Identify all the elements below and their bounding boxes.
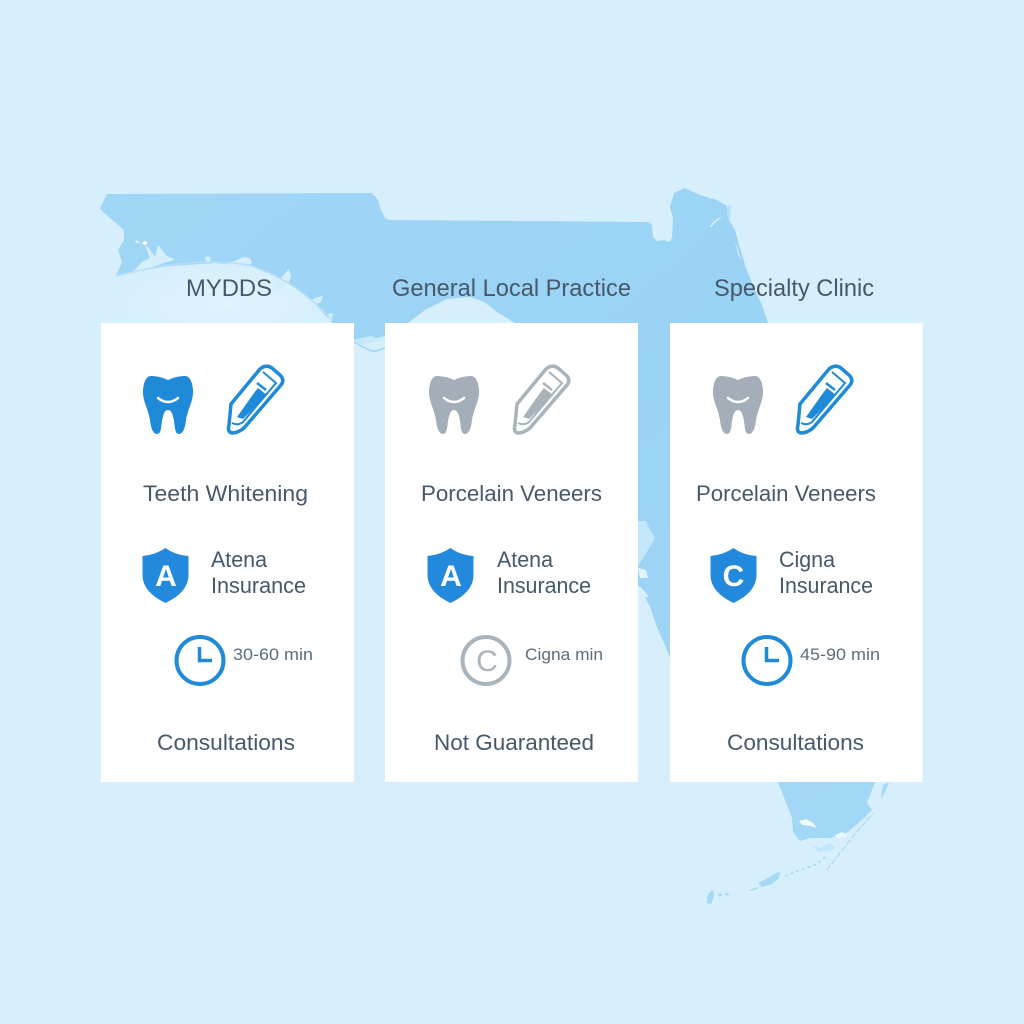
text: availability: Consultations — [727, 730, 864, 755]
icon: clock — [176, 637, 224, 684]
icon: grey circled C — [462, 637, 510, 684]
icon: blue tooth — [143, 376, 193, 434]
text: availability: Consultations — [157, 730, 295, 755]
text: service: Porcelain Veneers — [421, 481, 602, 506]
panel: MYDDS — [101, 323, 354, 782]
text: insurance — [497, 547, 591, 598]
icon: shield A — [142, 548, 188, 603]
panel: General Local Practice — [385, 323, 638, 782]
text: insurance — [779, 547, 873, 598]
text: insurance: Atena — [211, 547, 268, 572]
map: Lake and southern tip highlights — [799, 819, 817, 828]
text: time: 45-90 min — [800, 645, 880, 664]
map: barrier coast line — [116, 262, 332, 320]
heading: MYDDS: MYDDS — [186, 275, 272, 302]
heading: General Local Practice: General Local Practice — [392, 275, 631, 302]
icon: shield A — [428, 548, 474, 603]
icon: grey tooth — [429, 376, 479, 434]
text: insurance: Atena — [497, 547, 554, 572]
text: insurance — [211, 547, 306, 598]
icon: shield C: C — [723, 560, 744, 593]
map: Big Bend islands — [354, 336, 385, 344]
text: service: Porcelain Veneers — [696, 481, 876, 506]
text: time: 30-60 min — [233, 645, 313, 664]
text: service: Teeth Whitening — [143, 481, 308, 506]
panel: Specialty Clinic — [670, 323, 922, 782]
text: insurance: Insurance — [779, 573, 873, 598]
map: gulf coast island line — [354, 342, 385, 351]
icon: grey pencil clip — [514, 366, 569, 433]
icon: clock — [744, 637, 790, 684]
text: insurance: Cigna — [779, 547, 836, 572]
map: northeast sliver — [710, 217, 741, 260]
icon: shield A: A — [155, 560, 177, 593]
map: Florida Keys — [707, 782, 889, 904]
text: insurance: Insurance — [211, 573, 306, 598]
map: gulf inlet bays — [638, 521, 655, 566]
icon: shield C — [710, 548, 756, 603]
map: panhandle bays — [133, 240, 333, 322]
icon: blue pencil clip — [797, 366, 852, 433]
text: availability: Not Guaranteed — [434, 730, 594, 755]
icon: grey circled C: C — [476, 645, 498, 678]
text: time: Cigna min — [525, 645, 603, 664]
text: insurance: Insurance — [497, 573, 591, 598]
heading: Specialty Clinic: Specialty Clinic — [714, 275, 874, 302]
icon: shield A: A — [440, 560, 462, 593]
icon: blue pencil clip — [228, 366, 283, 433]
map: Florida silhouette — [100, 188, 889, 904]
icon: grey tooth — [713, 376, 763, 434]
